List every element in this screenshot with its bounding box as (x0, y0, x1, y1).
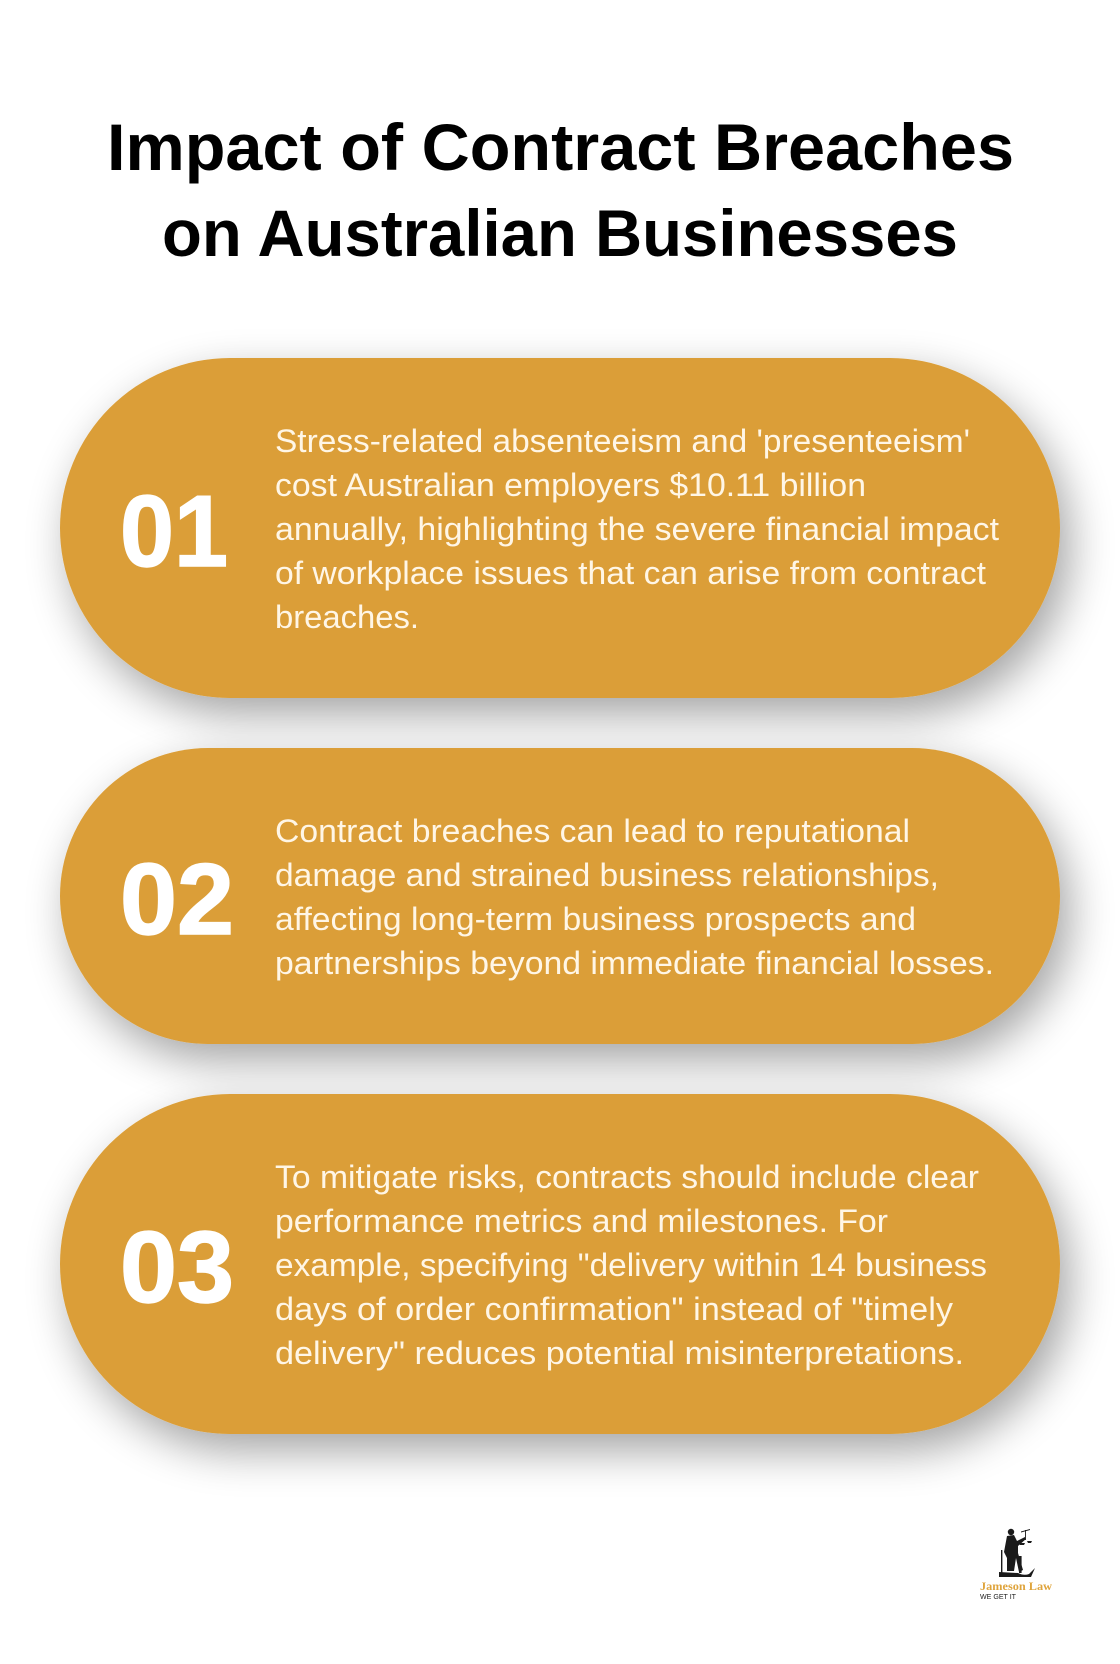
panel: 02 reputational damage (60, 748, 1060, 1044)
number 02: 02 (120, 844, 234, 956)
text block 03 (275, 1159, 987, 1371)
number 01: 01 (120, 476, 228, 588)
pill background 01 (60, 358, 1060, 698)
logo tagline: WE GET IT (980, 1592, 1016, 1601)
text block 01: of workplace issues that can arise from contract (275, 555, 986, 591)
text block 03: example, specifying "delivery within 14 business (275, 1247, 987, 1283)
text block 02: damage and strained business relationships, (275, 857, 939, 893)
text block 01: cost Australian employers $10.11 billion (275, 467, 866, 503)
text block 03: To mitigate risks, contracts should include clear (275, 1159, 979, 1195)
text block 02: partnerships beyond immediate financial losses. (275, 945, 994, 981)
text block 03: delivery" reduces potential misinterpretations. (275, 1335, 964, 1371)
logo: Jameson Law (980, 1529, 1053, 1601)
pill background 03 (60, 1094, 1060, 1434)
text block 02: affecting long-term business prospects and (275, 901, 916, 937)
text block 01 (275, 423, 999, 635)
text block 02: Contract breaches can lead to reputational (275, 813, 910, 849)
title (107, 110, 1014, 270)
number 03: 03 (120, 1212, 234, 1324)
icon: lady justice with L (999, 1529, 1035, 1577)
text block 01: annually, highlighting the severe financial impact (275, 511, 999, 547)
text block 03: performance metrics and milestones. For (275, 1203, 888, 1239)
title: Impact of Contract Breaches (107, 110, 1014, 184)
pill background 02 (60, 748, 1060, 1044)
text block 02 (275, 813, 994, 981)
text block 03: days of order confirmation" instead of "timely (275, 1291, 953, 1327)
panel: 03 mitigating risks (60, 1094, 1060, 1434)
text block 01: Stress-related absenteeism and 'presenteeism' (275, 423, 970, 459)
text block 01: breaches. (275, 599, 419, 635)
title: on Australian Businesses (162, 196, 958, 270)
panel: 01 stress-related costs (60, 358, 1060, 698)
logo wordmark: Jameson Law (980, 1581, 1053, 1593)
